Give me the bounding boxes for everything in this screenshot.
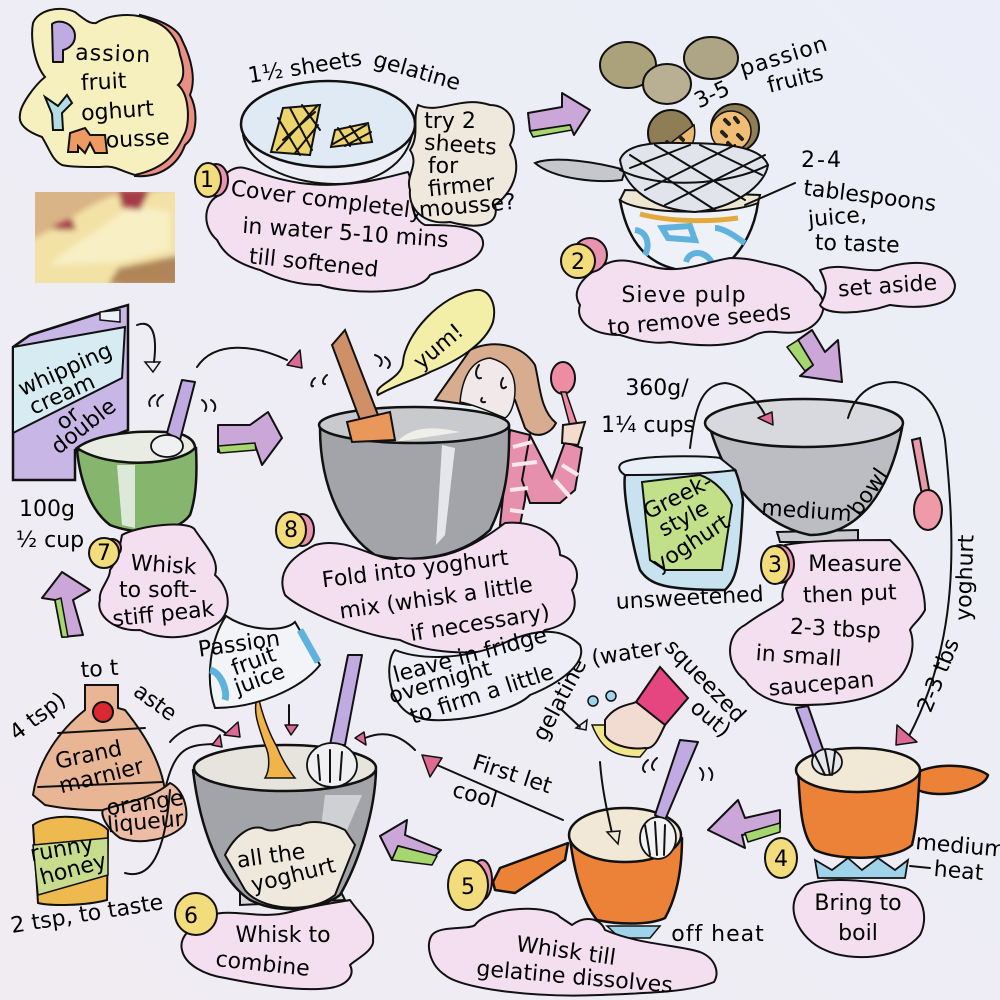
medium bowl: medium (760, 496, 852, 527)
label: juice amount: juice, (806, 203, 868, 233)
bowl of gelatine (241, 81, 415, 184)
number 5 (448, 860, 492, 910)
juice bowl: juice (230, 659, 288, 701)
cloud: orange liqueur (102, 783, 186, 841)
Grand Marnier bottle: Grand (53, 736, 124, 775)
cloud: fridge note: overnight (386, 656, 495, 709)
cloud: step 3 instruction: Measure (808, 552, 902, 577)
label: medium heat: heat (933, 857, 985, 886)
number 4 (765, 838, 797, 878)
title: fruit (80, 69, 127, 96)
label: gelatine note: squeezed (659, 635, 750, 728)
honey jar: runny (28, 832, 96, 867)
label: quantity (601, 376, 695, 438)
number 6: 6 (184, 904, 198, 929)
cloud: step 5 instruction (429, 909, 716, 999)
number 8: 8 (284, 518, 298, 543)
medium bowl: bowl (844, 464, 894, 521)
cloud: step 6 instruction (181, 900, 373, 989)
cloud: step 8 instruction: if necessary) (408, 600, 552, 647)
cloud: firmer tip: sheets (423, 131, 498, 161)
label: 3-5 passion fruits: passion (737, 32, 831, 82)
cloud: step 4 instruction: boil (838, 921, 878, 946)
step 1: gelatine (195, 46, 517, 292)
yoghurt tub: Greek- (640, 469, 716, 525)
cloud: firmer tip: try 2 (424, 109, 476, 134)
juice bowl (197, 616, 320, 708)
arrow: step 6 to 7 (42, 572, 90, 637)
Grand Marnier bottle (33, 685, 165, 810)
label: gelatine amount: gelatine (370, 47, 463, 96)
arrow: step 1 to 2 (528, 93, 590, 137)
label: off heat: off heat (671, 922, 765, 947)
step 5: whisk gelatine (429, 635, 765, 999)
arrow: step 2 to 3 (787, 330, 842, 382)
label: 4 tsp to taste: to t (80, 656, 120, 683)
speech bubble: yum: yum! (409, 319, 469, 375)
label: 4 tsp to taste (5, 656, 181, 746)
arrow: step 7 to 8 (218, 412, 282, 465)
cloud: step 7 instruction: Whisk (130, 551, 198, 580)
juice bowl: Passion (197, 626, 282, 663)
title (20, 9, 195, 176)
label: gelatine note: gelatine (528, 655, 592, 745)
cloud: step 5 instruction: Whisk till (515, 932, 617, 971)
juice bowl: fruit (228, 642, 280, 681)
cloud: step 6 instruction: combine (214, 947, 311, 982)
cloud: step 3 instruction: in small (755, 641, 842, 672)
cloud: set aside: set aside (837, 271, 938, 302)
number 5: 5 (461, 875, 475, 900)
number 8 (276, 512, 314, 548)
cloud: firmer tip: for (428, 154, 459, 179)
step 7: whipping cream (13, 305, 302, 637)
hand squeezing gelatine (562, 667, 688, 757)
cloud: firmer tip (409, 102, 517, 226)
cloud: fridge note: to firm a little (407, 660, 557, 730)
girl with spoon (435, 344, 585, 525)
arrow: cream transfer (137, 324, 302, 411)
passion fruits (600, 37, 759, 156)
cloud: step 3 instruction (730, 540, 925, 705)
step 2: sieve (535, 32, 955, 345)
cloud: step 8 instruction: mix (whisk a little (338, 573, 534, 625)
honey jar: honey (37, 849, 109, 891)
bowl: yoghurt (249, 853, 339, 898)
Grand Marnier bottle: marnier (57, 754, 147, 799)
cloud: step 7 instruction (99, 525, 228, 637)
title: oghurt (80, 96, 155, 127)
cream carton: cream (26, 370, 99, 421)
cloud: orange liqueur: liqueur (106, 807, 186, 838)
label: 3-5 passion fruits: 3-5 (691, 76, 734, 114)
cream carton (13, 305, 128, 480)
speech bubble: yum (377, 290, 494, 395)
flame (815, 858, 908, 878)
incoming arrows (165, 705, 415, 790)
label: first let cool: First let (469, 750, 555, 799)
cloud: orange liqueur: orange (105, 786, 185, 821)
bowl: all the (235, 839, 307, 874)
step 4: saucepan on heat (765, 706, 1000, 957)
arrow: step 5 to 6 (380, 820, 441, 865)
cream carton: double (47, 394, 121, 460)
label: juice amount (745, 148, 938, 258)
label: juice amount: 2-4 (801, 148, 843, 173)
number 1: 1 (200, 168, 214, 193)
cloud: step 4 instruction (794, 880, 924, 957)
number 6 (175, 893, 217, 935)
medium bowl (705, 399, 903, 542)
label: 3-5 passion fruits (691, 32, 831, 114)
spoon (912, 438, 942, 530)
cloud: step 3 instruction: 2-3 tbsp (789, 615, 881, 644)
number 2: 2 (571, 250, 585, 275)
cream carton: or (51, 402, 85, 436)
saucepan (796, 706, 988, 858)
title: assion (75, 41, 152, 68)
label: gelatine note: out) (685, 695, 735, 743)
label: tablespoons yoghurt: 2-3 tbs (913, 635, 965, 716)
label: off heat (607, 922, 765, 947)
yoghurt tub: style (655, 496, 713, 542)
number 3: 3 (768, 553, 782, 578)
label: 4 tsp to taste: 4 tsp) (5, 688, 71, 746)
label: first let cool: cool (450, 778, 500, 814)
cloud: step 8 instruction: Fold into yoghurt (321, 546, 510, 593)
label: 100g half cup: 100g (19, 497, 75, 522)
cloud: step 6 instruction: Whisk to (235, 923, 331, 948)
green bowl (77, 380, 196, 532)
cloud: step 4 instruction: Bring to (814, 891, 902, 916)
whisk (307, 655, 362, 787)
cloud: step 1 instruction: till softened (248, 244, 380, 283)
cloud: fridge note (386, 623, 581, 730)
label: 4 tsp to taste: aste (128, 679, 181, 727)
honey jar (28, 790, 170, 905)
cloud: step 1 instruction (206, 168, 483, 292)
step 8: folding (276, 290, 585, 730)
title: ousse (105, 125, 170, 154)
number 2 (561, 238, 607, 278)
label: juice amount: tablespoons (802, 176, 938, 217)
label: gelatine amount (246, 46, 463, 96)
saucepan (493, 740, 712, 924)
cloud: firmer tip: mousse? (418, 190, 517, 223)
label: quantity: 360g/ (625, 376, 689, 401)
label: gelatine note (528, 635, 750, 745)
label: first let cool (422, 750, 563, 820)
cloud: step 3 instruction: saucepan (768, 667, 875, 702)
label: gelatine amount: 1½ sheets (246, 46, 364, 89)
label: gelatine note: (water (590, 636, 665, 672)
step 3: yoghurt and bowl (601, 376, 980, 745)
number 7 (89, 538, 121, 568)
label: unsweetened: unsweetened (615, 582, 764, 615)
pouring juice (256, 695, 295, 778)
sieve and bowl (535, 143, 768, 285)
number 4: 4 (774, 847, 788, 872)
cream carton: whipping (15, 338, 116, 402)
cloud: fridge note: leave in fridge (391, 623, 550, 688)
number 7: 7 (97, 541, 111, 566)
label: 2 tsp to taste: 2 tsp, to taste (9, 890, 165, 939)
bowl (193, 745, 376, 909)
cloud: step 5 instruction: gelatine dissolves (475, 956, 674, 999)
number 3 (761, 545, 794, 584)
number 1 (195, 163, 228, 197)
cloud: step 3 instruction: then put (803, 580, 897, 609)
cloud: step 7 instruction: stiff peak (111, 597, 216, 632)
cloud: set aside (820, 263, 955, 312)
arrow: step 4 to 5 (708, 800, 780, 848)
step 6: large bowl (165, 616, 415, 989)
yoghurt tub (619, 456, 743, 590)
label: medium heat (910, 830, 1000, 886)
arrow: yoghurt transfer (690, 382, 951, 745)
large bowl (311, 330, 509, 559)
cloud: step 1 instruction: Cover completely (229, 176, 424, 225)
label: tablespoons yoghurt: yoghurt (952, 534, 980, 621)
label: quantity: 1¼ cups (601, 413, 695, 438)
cloud: firmer tip: firmer (427, 171, 497, 202)
label: tablespoons yoghurt (913, 534, 980, 716)
cloud: step 2 instruction: Sieve pulp (621, 283, 747, 308)
cloud: step 2 instruction (577, 258, 823, 345)
cloud: step 1 instruction: in water 5-10 mins (242, 214, 449, 253)
label: juice amount: to taste (814, 231, 900, 258)
label: 100g half cup: ½ cup (16, 528, 84, 553)
cloud: step 8 instruction (282, 523, 577, 652)
yoghurt tub: yoghurt (649, 509, 735, 577)
label: 100g half cup (16, 497, 84, 553)
cloud: step 2 instruction: to remove seeds (607, 300, 792, 341)
cloud: step 7 instruction: to soft- (119, 578, 197, 603)
label: 3-5 passion fruits: fruits (765, 61, 826, 99)
photo of mousse (35, 192, 175, 283)
